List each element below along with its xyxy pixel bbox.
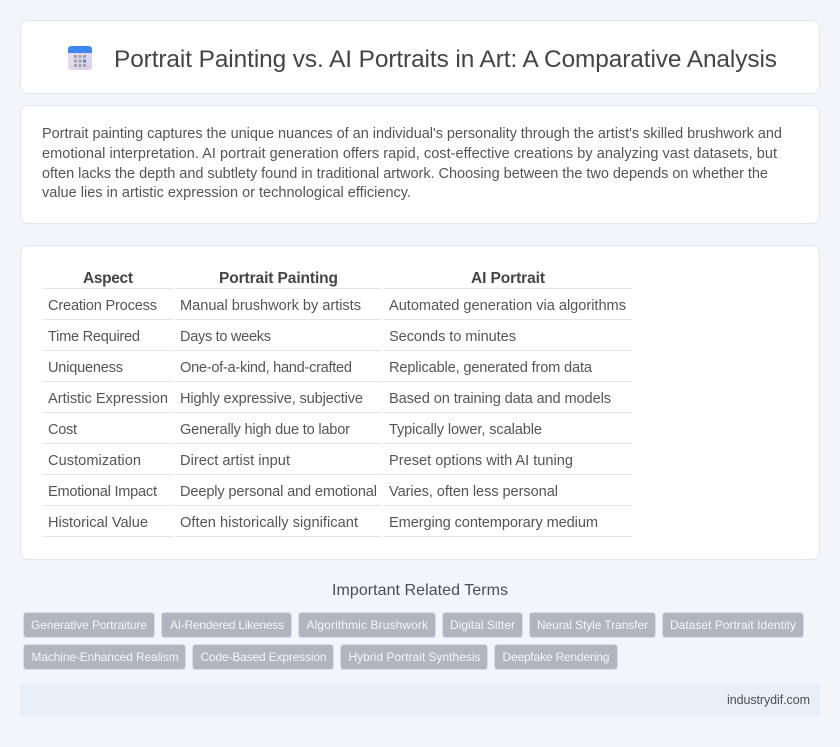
row: time required xyxy=(48,329,516,345)
tag: neural style transfer xyxy=(530,612,656,638)
tag: generative portraiture: Generative Portraiture xyxy=(31,618,147,632)
text block: introduction paragraph: emotional interpretation. AI portrait generation offers rapid, cost-effective creations by analyzing vast datasets, but xyxy=(42,146,777,162)
row: creation process xyxy=(48,298,626,314)
footer bar xyxy=(20,683,820,717)
footer source text: industrydif.com xyxy=(727,693,810,707)
row: artistic expression: Highly expressive, subjective xyxy=(180,391,363,407)
row: cost: Typically lower, scalable xyxy=(389,422,542,438)
tag: dataset portrait identity: Dataset Portrait Identity xyxy=(670,618,796,632)
tag: neural style transfer: Neural Style Transfer xyxy=(537,618,648,632)
tag: ai-rendered likeness xyxy=(162,612,292,638)
tag: code-based expression xyxy=(192,644,334,670)
tag: deepfake rendering: Deepfake Rendering xyxy=(502,650,610,664)
row: uniqueness xyxy=(48,360,593,376)
tag: generative portraiture xyxy=(24,612,154,638)
row: emotional impact: Emotional Impact xyxy=(48,484,157,500)
row: time required: Seconds to minutes xyxy=(389,329,516,345)
row: creation process: Automated generation via algorithms xyxy=(389,298,626,314)
icon: calendar xyxy=(68,46,92,70)
row: customization: Preset options with AI tuning xyxy=(389,453,573,469)
panel: introduction xyxy=(20,106,820,224)
text block: introduction paragraph xyxy=(42,126,782,201)
row: uniqueness: Uniqueness xyxy=(48,360,123,376)
table header row: Portrait Painting xyxy=(219,270,338,287)
row: artistic expression xyxy=(48,391,611,407)
row: historical value xyxy=(48,515,598,531)
row: uniqueness: One-of-a-kind, hand-crafted xyxy=(180,360,352,376)
row: creation process: Creation Process xyxy=(48,298,157,314)
row: customization xyxy=(48,453,573,469)
row: creation process: Manual brushwork by artists xyxy=(180,298,361,314)
row: historical value: Historical Value xyxy=(48,515,148,531)
table header row: Aspect xyxy=(83,270,133,287)
tag: machine-enhanced realism: Machine-Enhanced Realism xyxy=(32,650,179,664)
tag list: related terms xyxy=(24,612,804,670)
panel: comparison table xyxy=(20,246,820,560)
tag: deepfake rendering xyxy=(494,644,618,670)
tag: digital sitter xyxy=(442,612,522,638)
row: time required: Time Required xyxy=(48,329,140,345)
tag: hybrid portrait synthesis: Hybrid Portrait Synthesis xyxy=(348,650,481,664)
text block: introduction paragraph: value lies in artistic expression or technological efficiency. xyxy=(42,185,411,201)
table header row: AI Portrait xyxy=(471,270,545,287)
text block: introduction paragraph: Portrait painting captures the unique nuances of an individual's personality through the artist's skilled brushwork and xyxy=(42,126,782,142)
tag: algorithmic brushwork: Algorithmic Brushwork xyxy=(306,618,428,632)
row: uniqueness: Replicable, generated from data xyxy=(389,360,593,376)
row: artistic expression: Artistic Expression xyxy=(48,391,168,407)
row: artistic expression: Based on training data and models xyxy=(389,391,611,407)
tag: dataset portrait identity xyxy=(662,612,804,638)
heading: important related terms: Important Related Terms xyxy=(332,582,508,599)
row: cost: Cost xyxy=(48,422,77,438)
row: cost: Generally high due to labor xyxy=(180,422,350,438)
tag: algorithmic brushwork xyxy=(298,612,436,638)
row: time required: Days to weeks xyxy=(180,329,271,345)
tag: code-based expression: Code-Based Expression xyxy=(200,650,326,664)
panel: header xyxy=(20,20,820,94)
tag: digital sitter: Digital Sitter xyxy=(450,618,515,632)
row: customization: Direct artist input xyxy=(180,453,290,469)
table header row xyxy=(83,270,545,287)
row: emotional impact: Deeply personal and emotional xyxy=(180,484,377,500)
row: emotional impact xyxy=(48,484,558,500)
row: historical value: Often historically significant xyxy=(180,515,358,531)
tag: hybrid portrait synthesis xyxy=(340,644,488,670)
tag: machine-enhanced realism xyxy=(24,644,186,670)
text block: introduction paragraph: often lacks the depth and subtlety found in traditional artwork. Choosing between the two depends on whether the xyxy=(42,166,768,182)
tag: ai-rendered likeness: AI-Rendered Likeness xyxy=(170,618,284,632)
row: emotional impact: Varies, often less personal xyxy=(389,484,558,500)
row: cost xyxy=(48,422,542,438)
title: Portrait Painting vs. AI Portraits in Art: A Comparative Analysis xyxy=(114,46,777,73)
row: historical value: Emerging contemporary medium xyxy=(389,515,598,531)
row: customization: Customization xyxy=(48,453,141,469)
